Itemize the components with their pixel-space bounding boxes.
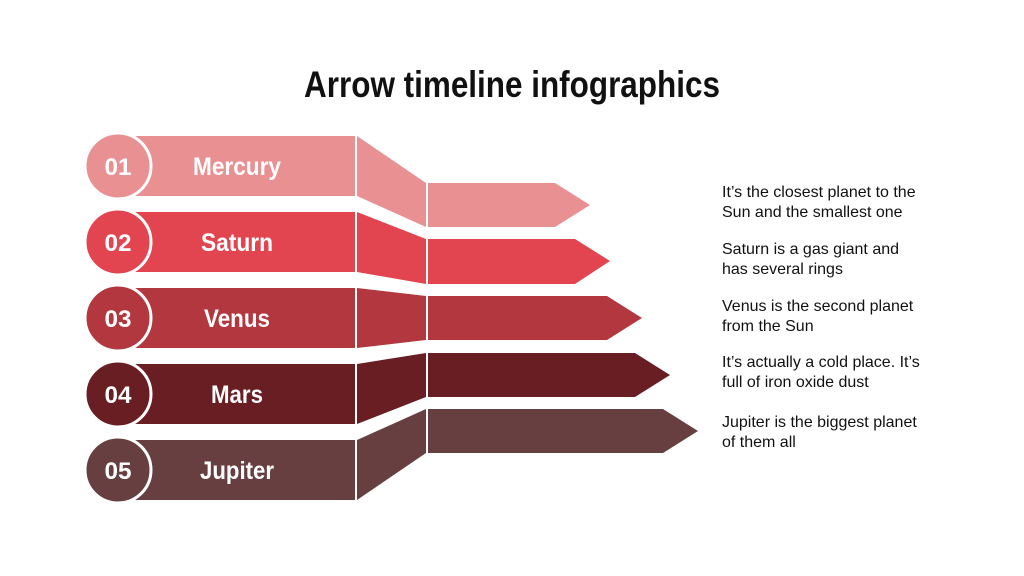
description: Mercury: It’s the closest planet to the bbox=[722, 184, 916, 201]
description: Jupiter bbox=[722, 414, 917, 451]
description: Mercury: Sun and the smallest one bbox=[722, 204, 903, 221]
description: Venus bbox=[722, 298, 914, 335]
row 1: Mercury bbox=[85, 133, 590, 227]
row 3: Venus: 03 bbox=[104, 306, 132, 333]
description: Jupiter: of them all bbox=[722, 434, 796, 451]
description: Venus: from the Sun bbox=[722, 318, 814, 335]
description: Mercury bbox=[722, 184, 916, 221]
row 3: Venus bbox=[85, 285, 642, 351]
row 2: Saturn: Saturn bbox=[201, 229, 273, 257]
description: Saturn: Saturn is a gas giant and bbox=[722, 241, 899, 258]
row 5: Jupiter: 05 bbox=[104, 458, 132, 485]
row 1: Mercury: Mercury bbox=[193, 153, 281, 181]
description: Mars bbox=[722, 354, 920, 391]
row 2: Saturn: 02 bbox=[104, 230, 132, 257]
row 2: Saturn bbox=[85, 209, 610, 284]
description: Saturn bbox=[722, 241, 899, 278]
row 5: Jupiter: Jupiter bbox=[200, 457, 274, 485]
title: Arrow timeline infographics bbox=[304, 64, 720, 105]
description: Mars: It’s actually a cold place. It’s bbox=[722, 354, 920, 371]
row 4: Mars bbox=[85, 353, 670, 427]
row 4: Mars: 04 bbox=[104, 382, 132, 409]
row 1: Mercury: 01 bbox=[104, 154, 132, 181]
description: Mars: full of iron oxide dust bbox=[722, 374, 869, 391]
row 5: Jupiter bbox=[85, 409, 698, 503]
row 3: Venus: Venus bbox=[204, 305, 270, 333]
description: Venus: Venus is the second planet bbox=[722, 298, 913, 315]
description: Jupiter: Jupiter is the biggest planet bbox=[722, 414, 917, 431]
description: Saturn: has several rings bbox=[722, 261, 843, 278]
row 4: Mars: Mars bbox=[211, 381, 263, 409]
